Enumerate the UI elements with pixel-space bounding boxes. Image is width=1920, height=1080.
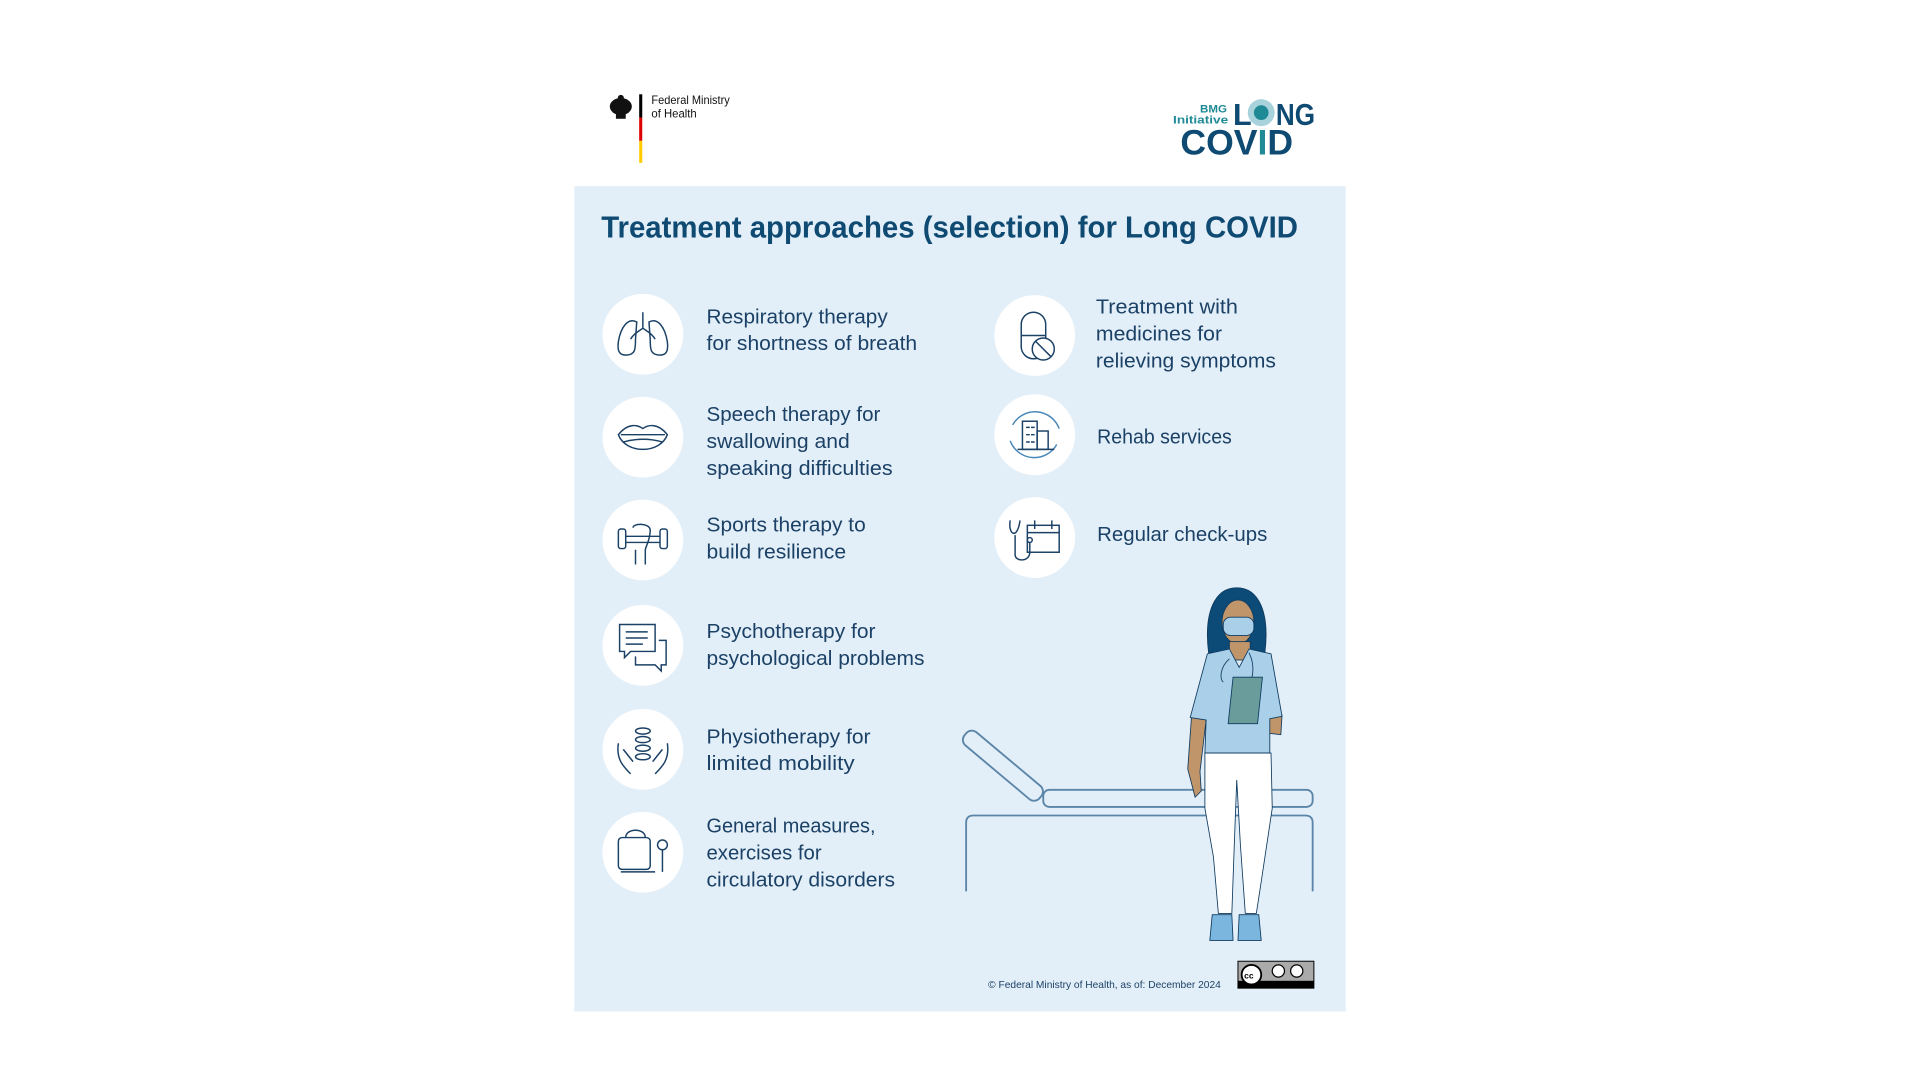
item: physiotherapy: Physiotherapy for [707, 726, 871, 748]
icon: pills [994, 295, 1075, 376]
icon: buildings with arrows [994, 394, 1075, 475]
icon: cc by-nd badge: cc [1244, 970, 1254, 980]
item: speech therapy [602, 397, 893, 480]
item: sports therapy: Sports therapy to [707, 514, 866, 536]
icon: stethoscope calendar [994, 497, 1075, 578]
item: general measures: circulatory disorders [707, 870, 895, 892]
item: psychotherapy: psychological problems [707, 648, 924, 670]
item: general measures: General measures, [707, 816, 876, 838]
icon: lips [602, 397, 683, 478]
item: regular check-ups [994, 497, 1267, 578]
logo: BMG initiative long covid: Initiative [1173, 115, 1228, 127]
icon: lungs [602, 294, 683, 375]
item: rehab services [994, 394, 1232, 475]
icon: circulation device [602, 812, 683, 893]
item: sports therapy [602, 500, 866, 580]
icon: dumbbell fist [602, 500, 683, 580]
icon: hands spine [602, 709, 683, 790]
item: medicines: relieving symptoms [1096, 350, 1276, 372]
item: general measures [602, 812, 895, 893]
item: rehab services: Rehab services [1097, 426, 1232, 448]
title: Treatment approaches (selection) for Long COVID [601, 211, 1298, 245]
logo: federal ministry of health: of Health [651, 108, 697, 121]
item: medicines: medicines for [1096, 323, 1222, 345]
panel: main background [574, 186, 1346, 1011]
icon: speech bubbles [602, 605, 683, 686]
item: physiotherapy: limited mobility [707, 753, 856, 775]
icon: cc by-nd badge [1238, 961, 1314, 988]
item: speech therapy: speaking difficulties [707, 458, 893, 480]
item: respiratory therapy [602, 294, 917, 375]
footer: copyright: © Federal Ministry of Health, as of: December 2024 [988, 980, 1221, 991]
item: medicines: Treatment with [1096, 296, 1238, 318]
item: general measures: exercises for [707, 843, 822, 865]
logo: BMG initiative long covid [1173, 98, 1315, 162]
item: respiratory therapy: for shortness of breath [707, 333, 917, 355]
logo: BMG initiative long covid: BMG [1200, 104, 1227, 116]
item: psychotherapy [602, 605, 924, 686]
item: regular check-ups: Regular check-ups [1097, 524, 1267, 546]
item: sports therapy: build resilience [707, 541, 846, 563]
item: medicines [994, 295, 1276, 376]
logo: BMG initiative long covid: COVID [1180, 122, 1293, 162]
item: speech therapy: Speech therapy for [707, 404, 881, 426]
item: psychotherapy: Psychotherapy for [707, 621, 876, 643]
item: physiotherapy [602, 709, 871, 790]
item: speech therapy: swallowing and [707, 431, 850, 453]
logo: BMG initiative long covid: L [1233, 98, 1252, 132]
illustration: examination bed [960, 728, 1313, 891]
icon: federal eagle [610, 95, 632, 119]
logo: federal ministry of health [610, 94, 730, 163]
logo: federal ministry of health: Federal Ministry [651, 94, 730, 107]
item: respiratory therapy: Respiratory therapy [707, 306, 889, 328]
logo: BMG initiative long covid: NG [1276, 98, 1315, 132]
illustration: nurse [1188, 588, 1282, 940]
